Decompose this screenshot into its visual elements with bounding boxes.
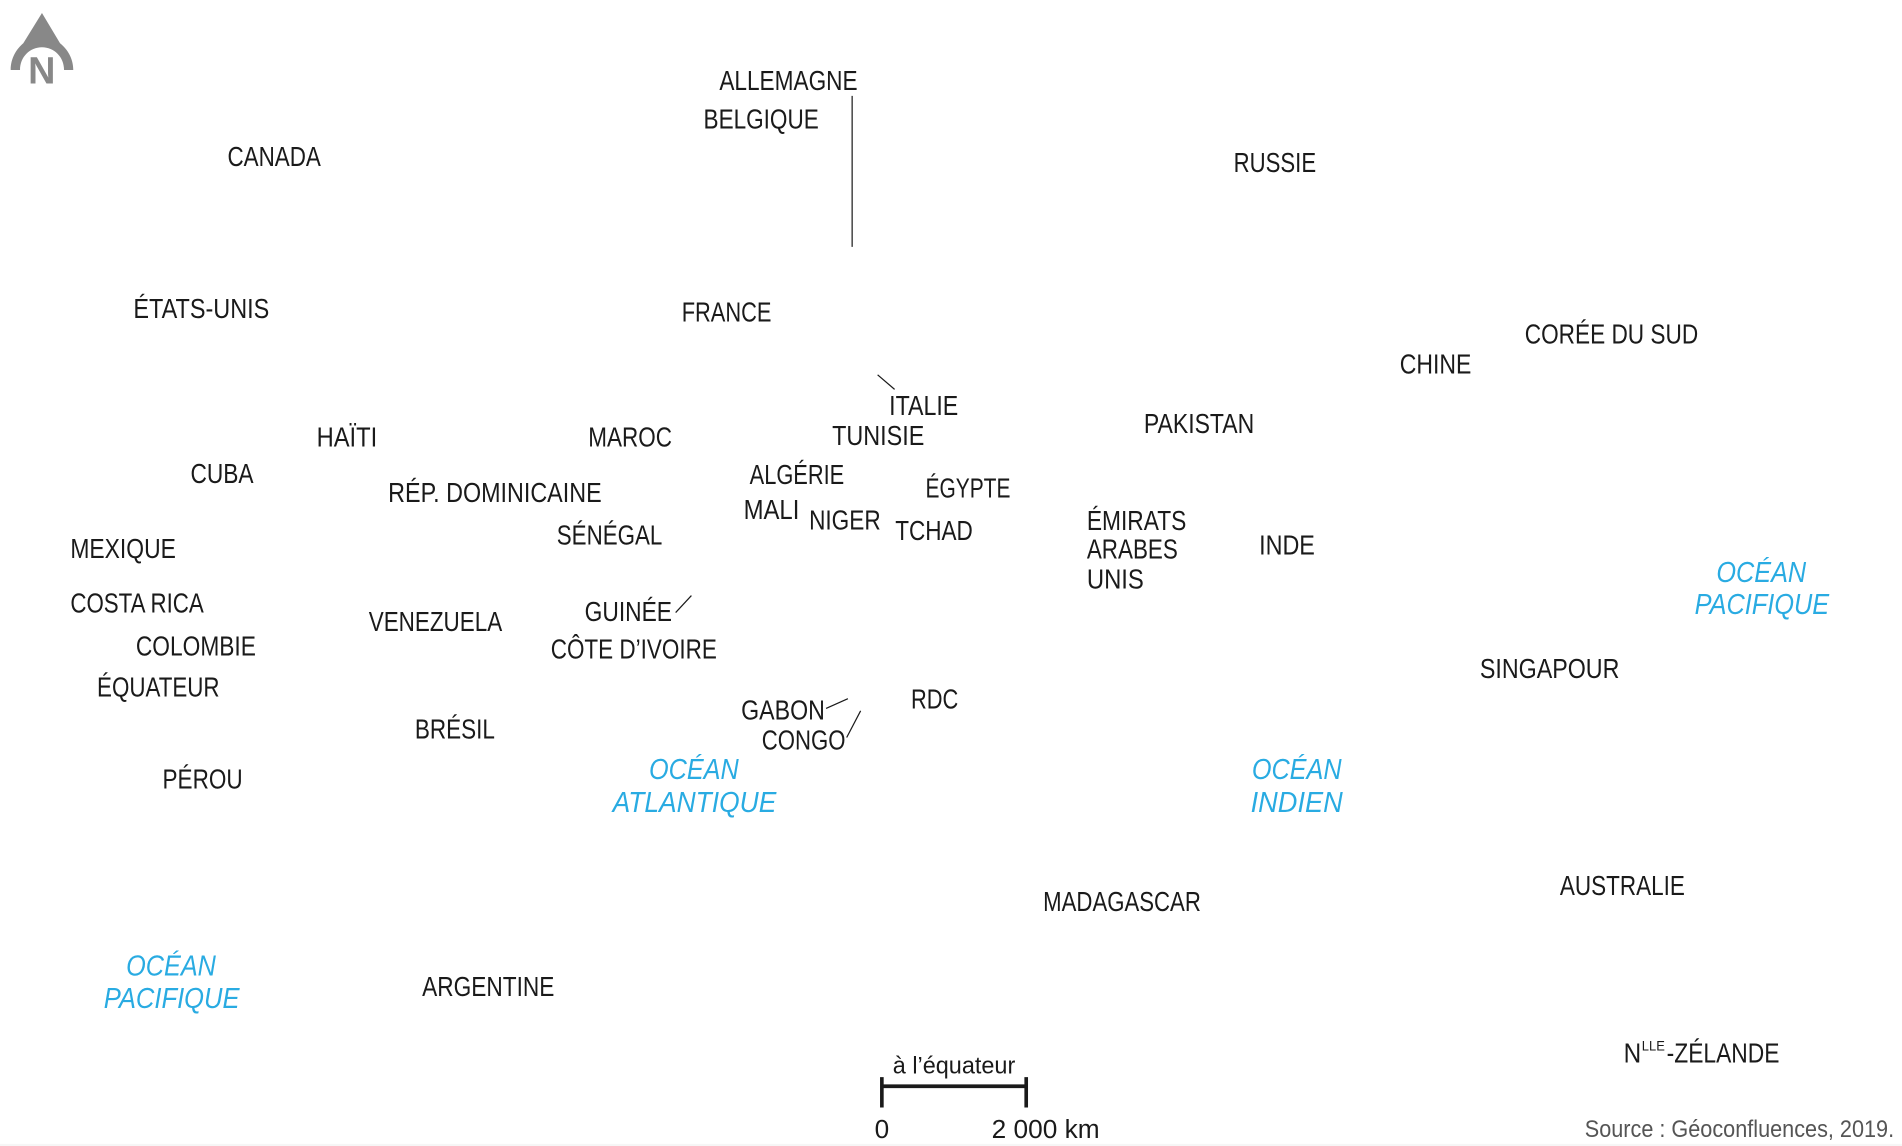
label: Nouvelle-Zélande: -ZÉLANDE bbox=[1667, 1038, 1779, 1069]
label: Australie: AUSTRALIE bbox=[1560, 870, 1685, 901]
label: Madagascar: MADAGASCAR bbox=[1043, 886, 1201, 917]
label: Singapour: SINGAPOUR bbox=[1480, 653, 1619, 684]
scale bar: 2 000 km bbox=[992, 1116, 1100, 1144]
label: Océan Pacifique west: PACIFIQUE bbox=[104, 983, 240, 1015]
label: Mexique: MEXIQUE bbox=[70, 533, 176, 564]
label: Océan Indien bbox=[1251, 753, 1344, 819]
label: Océan Indien: OCÉAN bbox=[1252, 753, 1342, 786]
leader lines bbox=[676, 96, 895, 738]
label: Océan Pacifique west bbox=[104, 949, 240, 1015]
label: Pérou: PÉROU bbox=[163, 763, 243, 794]
label: Guinée: GUINÉE bbox=[585, 596, 672, 627]
label: Océan Atlantique: OCÉAN bbox=[649, 753, 740, 786]
label: Émirats arabes unis bbox=[1087, 505, 1186, 594]
label: Mali: MALI bbox=[744, 494, 799, 525]
label: Algérie: ALGÉRIE bbox=[750, 459, 844, 490]
label: RDC: RDC bbox=[911, 683, 958, 714]
label: Émirats arabes unis: UNIS bbox=[1087, 563, 1144, 594]
label: Nouvelle-Zélande: LLE bbox=[1642, 1037, 1665, 1053]
label: Russie: RUSSIE bbox=[1234, 147, 1316, 178]
label: Émirats arabes unis: ÉMIRATS bbox=[1087, 505, 1186, 536]
label: Rép. Dominicaine: RÉP. DOMINICAINE bbox=[388, 477, 602, 508]
label: Océan Pacifique west: OCÉAN bbox=[126, 949, 217, 982]
label: Côte d'Ivoire: CÔTE D’IVOIRE bbox=[551, 634, 717, 665]
label: Nouvelle-Zélande bbox=[1624, 1037, 1779, 1069]
icon: north arrow bbox=[11, 13, 73, 91]
label: Émirats arabes unis: ARABES bbox=[1087, 534, 1178, 565]
scale bar: à l’équateur bbox=[893, 1053, 1015, 1080]
label: Cuba: CUBA bbox=[190, 458, 254, 489]
label: Inde: INDE bbox=[1259, 529, 1315, 560]
label: Allemagne: ALLEMAGNE bbox=[719, 65, 858, 96]
label: Tchad: TCHAD bbox=[895, 515, 973, 546]
label: Océan Atlantique: ATLANTIQUE bbox=[611, 787, 777, 819]
label: Océan Atlantique bbox=[611, 753, 777, 819]
label: Brésil: BRÉSIL bbox=[415, 714, 495, 745]
country labels bbox=[70, 65, 1779, 1069]
scale bar: 0 bbox=[875, 1116, 889, 1144]
label: Océan Pacifique east: PACIFIQUE bbox=[1695, 589, 1830, 621]
label: Haïti: HAÏTI bbox=[317, 421, 377, 452]
label: Océan Pacifique east bbox=[1695, 556, 1830, 621]
label: Argentine: ARGENTINE bbox=[422, 971, 554, 1002]
label: France: FRANCE bbox=[682, 296, 771, 327]
label: Chine: CHINE bbox=[1400, 349, 1471, 380]
label: Niger: NIGER bbox=[809, 504, 881, 535]
label: Canada: CANADA bbox=[227, 141, 321, 172]
label: Sénégal: SÉNÉGAL bbox=[557, 520, 662, 551]
label: Colombie: COLOMBIE bbox=[136, 631, 256, 662]
label: Pakistan: PAKISTAN bbox=[1144, 408, 1254, 439]
label: Égypte: ÉGYPTE bbox=[926, 472, 1010, 503]
label: Italie: ITALIE bbox=[889, 390, 958, 421]
icon: north arrow: N bbox=[28, 49, 55, 91]
label: Gabon: GABON bbox=[741, 694, 825, 725]
label: Maroc: MAROC bbox=[588, 421, 672, 452]
label: Océan Pacifique east: OCÉAN bbox=[1716, 556, 1807, 589]
label: Corée du Sud: CORÉE DU SUD bbox=[1525, 318, 1698, 349]
scale bar bbox=[875, 1053, 1100, 1144]
label: Venezuela: VENEZUELA bbox=[369, 606, 503, 637]
label: Nouvelle-Zélande: N bbox=[1624, 1038, 1641, 1069]
label: Équateur: ÉQUATEUR bbox=[97, 671, 220, 702]
ocean labels bbox=[104, 556, 1830, 1015]
label: Tunisie: TUNISIE bbox=[832, 420, 924, 451]
label: Océan Indien: INDIEN bbox=[1251, 787, 1344, 819]
label: États-Unis: ÉTATS-UNIS bbox=[133, 293, 269, 324]
label: Congo: CONGO bbox=[762, 725, 845, 756]
label: Costa Rica: COSTA RICA bbox=[70, 588, 204, 619]
label: Belgique: BELGIQUE bbox=[704, 104, 819, 135]
